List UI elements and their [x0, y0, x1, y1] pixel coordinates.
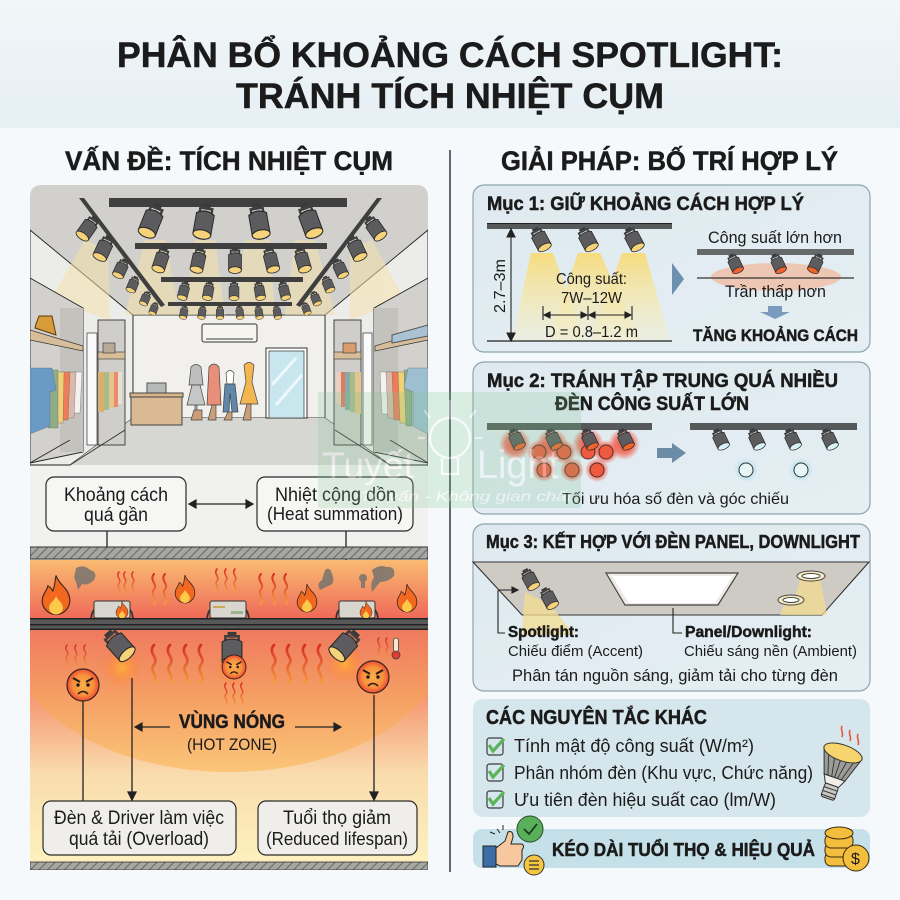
box: overload: Đèn & Driver làm việc — [54, 808, 224, 829]
spotlights row 4 — [179, 305, 282, 320]
drivers with flames — [91, 601, 378, 619]
low ceiling spot group — [697, 249, 854, 291]
panel 5: result banner: KÉO DÀI TUỔI THỌ & HIỆU QUẢ — [552, 839, 815, 860]
right displays: shelves, boxes and clothing — [334, 278, 428, 465]
mannequins — [187, 362, 258, 420]
panel 1: keep proper spacing: TĂNG KHOẢNG CÁCH — [693, 326, 858, 345]
title banner: PHÂN BỔ KHOẢNG CÁCH SPOTLIGHT: — [117, 35, 783, 75]
lower background heat gradient — [30, 693, 428, 862]
spotlights row 3 — [177, 282, 291, 301]
track rail — [30, 618, 428, 630]
heat waves lower — [66, 638, 388, 705]
icon: coins — [825, 827, 869, 871]
watermark: Tư vấn - Không gian chất — [360, 488, 573, 504]
box: overload — [43, 801, 236, 855]
watermark: Tuyết — [322, 445, 415, 486]
box: overload: quá tải (Overload) — [69, 829, 209, 850]
panel 5: result banner — [473, 816, 870, 875]
arrow: double between boxes — [189, 500, 253, 508]
spotlights side rails — [74, 213, 389, 316]
hot zone arrows — [135, 723, 341, 731]
panel 3: combine with panel and downlight: Chiếu điểm (Accent) — [508, 643, 643, 660]
panel 1: keep proper spacing: D = 0.8–1.2 m — [545, 324, 638, 341]
checklist: Ưu tiên đèn hiệu suất cao (lm/W) — [514, 790, 776, 810]
icon: thumbs up — [483, 825, 524, 867]
box: reduced lifespan: (Reduced lifespan) — [266, 829, 408, 849]
panel 3: combine with panel and downlight: Panel/Downlight: — [685, 624, 812, 641]
box: too close spacing: Khoảng cách — [64, 485, 168, 506]
box: too close spacing: quá gần — [84, 505, 148, 526]
checklist: Phân nhóm đèn (Khu vực, Chức năng) — [514, 763, 813, 783]
watermark: Light — [477, 443, 559, 487]
panel 3: combine with panel and downlight: Phân tán nguồn sáng, giảm tải cho từng đèn — [512, 666, 838, 685]
connector line: spacing — [106, 532, 108, 560]
optimized lights — [690, 423, 857, 482]
panel 4: other principles — [473, 699, 870, 817]
height dimension — [507, 229, 515, 341]
smoke clouds — [74, 566, 394, 592]
panel 1: keep proper spacing: 7W–12W — [561, 290, 623, 307]
spotlights row 1 — [138, 207, 324, 240]
counter and laptop — [130, 383, 183, 425]
checklist: Tính mật độ công suất (W/m²) — [514, 736, 754, 756]
panel 1: keep proper spacing — [473, 185, 870, 352]
panel 2: avoid concentration — [473, 362, 870, 514]
box: too close spacing — [46, 477, 186, 531]
checklist — [487, 736, 813, 810]
panel 3: combine with panel and downlight: Mục 3: KẾT HỢP VỚI ĐÈN PANEL, DOWNLIGHT — [486, 531, 860, 552]
hot zone half ellipse — [30, 630, 428, 772]
watermark — [318, 392, 581, 508]
ceiling panel light — [606, 573, 738, 605]
down arrow — [760, 306, 790, 319]
box: heat summation — [257, 477, 413, 531]
panel 2: avoid concentration: Mục 2: TRÁNH TẬP TRUNG QUÁ NHIỀU — [487, 370, 838, 392]
icon: check circle — [517, 816, 543, 842]
hot zone label: VÙNG NÓNG — [179, 711, 285, 733]
box: reduced lifespan — [258, 801, 417, 855]
icon: hot bulb — [808, 726, 865, 805]
air conditioner — [202, 324, 257, 342]
panel 1: keep proper spacing: 2.7–3m — [492, 259, 509, 313]
spacing dimension — [543, 306, 632, 320]
connector line: heat — [345, 532, 347, 560]
spotlights hot — [104, 629, 362, 684]
heat waves upper — [118, 569, 287, 604]
panel 2: avoid concentration: ĐÈN CÔNG SUẤT LỚN — [555, 393, 749, 415]
box: heat summation: Nhiệt cộng dồn — [275, 485, 396, 506]
rail and spotlights — [487, 223, 672, 341]
panel 1: keep proper spacing: Công suất: — [556, 271, 627, 288]
panel 1: keep proper spacing: Công suất lớn hơn — [708, 228, 842, 247]
hot zone label — [179, 711, 285, 754]
title banner — [0, 0, 900, 128]
right arrow — [657, 443, 686, 463]
hot ceiling band — [30, 560, 428, 618]
store interior scene — [30, 185, 428, 465]
accent spotlights — [519, 566, 560, 611]
track rails — [79, 198, 382, 307]
panel 3: combine with panel and downlight: Chiếu sáng nền (Ambient) — [684, 643, 857, 660]
icon: coins: $ — [851, 851, 860, 868]
panel 3: combine with panel and downlight: Spotlight: — [508, 624, 579, 641]
thermometer — [392, 638, 400, 659]
box: reduced lifespan: Tuổi thọ giảm — [283, 808, 391, 829]
panel 1: keep proper spacing: Mục 1: GIỮ KHOẢNG CÁCH HỢP LÝ — [487, 193, 804, 215]
callout lines — [498, 587, 682, 633]
chevron arrow — [672, 263, 684, 295]
panel 1: keep proper spacing: Trần thấp hơn — [725, 282, 826, 301]
concentrated red lights — [487, 423, 652, 482]
flames — [42, 575, 417, 615]
connector lines to outcome boxes — [83, 678, 378, 801]
spotlights row 2 — [152, 249, 312, 274]
panel 2: avoid concentration: Tối ưu hóa số đèn và góc chiếu — [562, 491, 789, 508]
panel 3: combine with panel and downlight — [473, 524, 870, 691]
downlights — [778, 571, 825, 605]
hot zone label: (HOT ZONE) — [187, 735, 277, 754]
title banner: TRÁNH TÍCH NHIỆT CỤM — [236, 76, 664, 116]
ceiling plane — [473, 562, 869, 615]
left displays: shelves, bags and clothing — [30, 278, 125, 465]
light beams — [512, 253, 670, 341]
heading: problem: VẤN ĐỀ: TÍCH NHIỆT CỤM — [65, 145, 393, 176]
heading: solution: GIẢI PHÁP: BỐ TRÍ HỢP LÝ — [501, 144, 838, 176]
box: heat summation: (Heat summation) — [267, 504, 403, 524]
panel 4: other principles: CÁC NGUYÊN TẮC KHÁC — [486, 705, 707, 729]
icon: note circle — [524, 855, 544, 875]
floor hatch — [30, 862, 428, 870]
angry faces — [67, 655, 389, 701]
beams — [522, 578, 827, 635]
ceiling hatch — [30, 547, 428, 559]
panel: store illustration and heat diagram — [30, 185, 428, 870]
door — [266, 348, 307, 418]
